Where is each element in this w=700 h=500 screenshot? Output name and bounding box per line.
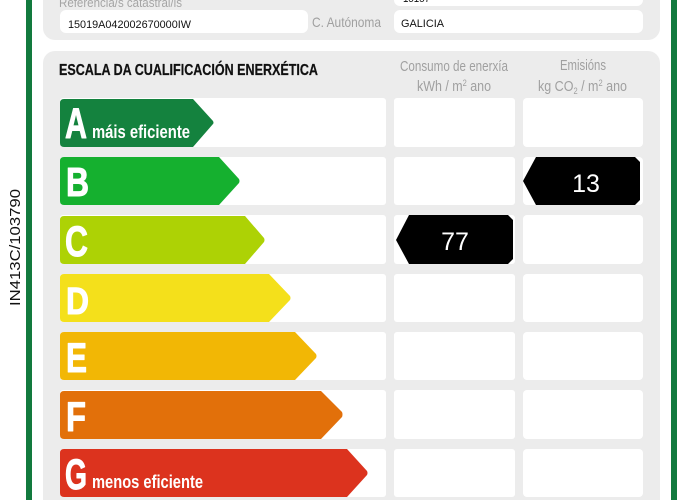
vertical reference code: IN413C/103790 <box>8 189 24 306</box>
label: autonomous community: C. Autónoma <box>312 14 381 30</box>
column heading: emissions: 2 <box>573 86 578 96</box>
bar D: D <box>66 281 89 323</box>
left green border <box>26 0 32 500</box>
bar A <box>60 99 214 148</box>
right green border <box>671 0 677 500</box>
marker: consumption 77 <box>396 215 513 264</box>
field: cadastral reference: 15019A042002670000IW <box>68 19 192 31</box>
column heading: emissions: 2 <box>598 78 603 88</box>
bar E: E <box>66 334 87 381</box>
column heading: emissions: ano <box>603 78 627 95</box>
marker: emissions 13 <box>523 157 640 205</box>
column heading: energy consumption: 2 <box>463 78 467 88</box>
panel: energy rating scale <box>43 51 660 500</box>
marker: emissions 13: 13 <box>572 170 600 198</box>
bar A: máis eficiente <box>92 122 190 142</box>
column heading: energy consumption: Consumo de enerxía <box>400 58 509 75</box>
bar F <box>60 391 342 440</box>
bar G <box>60 449 368 499</box>
column heading: emissions <box>538 57 627 96</box>
field: cadastral reference <box>60 10 308 33</box>
table cells <box>60 98 643 497</box>
panel: property data <box>43 0 660 40</box>
bar G: G <box>65 451 87 499</box>
bar D <box>60 274 290 323</box>
column heading: emissions: Emisións <box>560 57 606 74</box>
bar B: B <box>66 159 89 205</box>
column heading: emissions: / m <box>578 78 598 95</box>
bar G: menos eficiente <box>92 472 203 492</box>
field: locality, cut off <box>394 0 643 6</box>
bar B <box>60 157 240 205</box>
column heading: energy consumption: kWh / m <box>417 78 472 95</box>
bar E <box>60 332 316 381</box>
bar A: A <box>65 100 87 148</box>
bar C: C <box>65 218 88 266</box>
field: autonomous community: GALICIA <box>401 18 445 30</box>
column heading: emissions: kg CO <box>538 78 581 95</box>
marker: consumption 77: 77 <box>441 228 469 256</box>
bar F: F <box>66 393 86 440</box>
field: autonomous community <box>394 10 643 33</box>
bar C <box>60 216 264 266</box>
column heading: energy consumption <box>400 58 509 95</box>
column heading: energy consumption: ano <box>467 78 491 95</box>
heading: ESCALA DA CUALIFICACIÓN ENERXÉTICA <box>59 61 318 79</box>
